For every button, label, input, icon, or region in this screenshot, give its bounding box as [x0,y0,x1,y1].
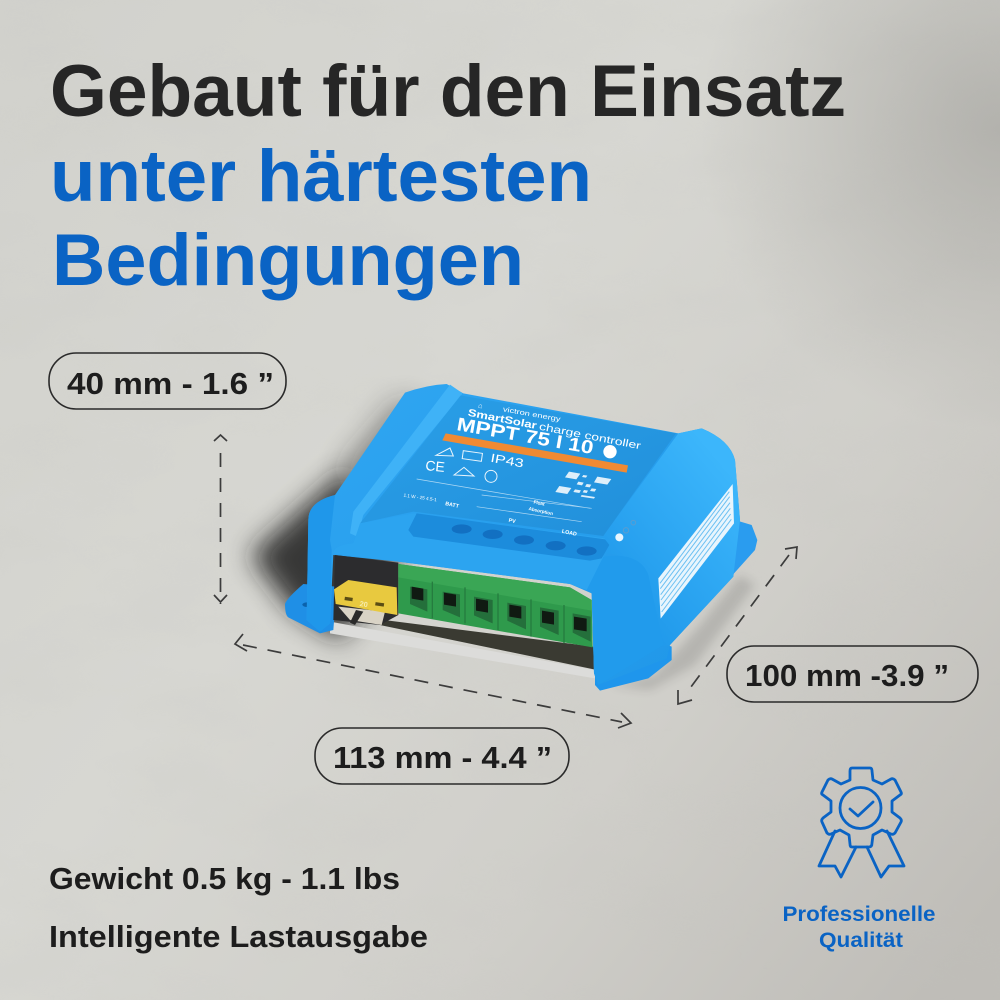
green terminal block [398,564,593,647]
label text: CE [425,457,446,475]
weight text: Gewicht 0.5 kg - 1.1 lbs [49,861,400,896]
title [50,51,846,301]
product: MPPT charge controller: 20 [359,599,368,609]
arrow: width [235,634,631,728]
label text: IP43 [489,451,525,470]
label text: MPPT 75 I 10 [455,413,595,458]
label text: LOAD [561,529,577,538]
width label: 113 mm - 4.4 ” [333,740,552,775]
product: MPPT charge controller [285,384,757,691]
left shoulder ridge [350,385,463,537]
orange strip [442,433,628,473]
title: Gebaut für den Einsatz [50,51,846,132]
left pillar [307,495,335,632]
label text: SmartSolar [467,408,538,432]
load output text: Intelligente Lastausgabe [49,919,428,954]
top panel [360,395,676,536]
yellow fuse [334,580,397,615]
title: Bedingungen [52,220,524,301]
label text: Float [533,499,545,507]
mounting tabs [285,584,337,633]
base shadow and metal plate [330,622,595,678]
QR code [555,472,611,499]
front right pillar [587,556,663,685]
title: unter härtesten [50,136,592,217]
main body [307,384,740,685]
width label [315,728,569,784]
quality text: Professionelle [782,903,936,926]
label text: ⌂ [478,401,483,410]
label text: Absorption [528,506,554,516]
quality text: Qualität [819,929,903,952]
depth label: 100 mm -3.9 ” [745,658,949,693]
label text: PV [508,518,517,525]
arrow: height [214,435,227,604]
fuse bay [333,555,398,625]
fuse holder [338,607,385,625]
right end cap [603,428,740,647]
label text: victron energy [502,406,562,424]
front lip [333,513,605,590]
shadow of product [250,400,755,690]
label text: charge controller [538,422,642,452]
arrow: depth [678,547,797,704]
label text: BATT [445,501,460,510]
quality text [782,903,936,952]
label text: 1.1 W - 25 4.5-1 [403,493,437,502]
label symbols [417,448,592,522]
height label [49,353,286,409]
led holes and ports [452,524,597,556]
icon: quality badge [819,768,904,877]
height label: 40 mm - 1.6 ” [67,366,274,401]
side vent label [658,484,734,619]
label text [403,401,642,538]
depth label [727,646,978,702]
